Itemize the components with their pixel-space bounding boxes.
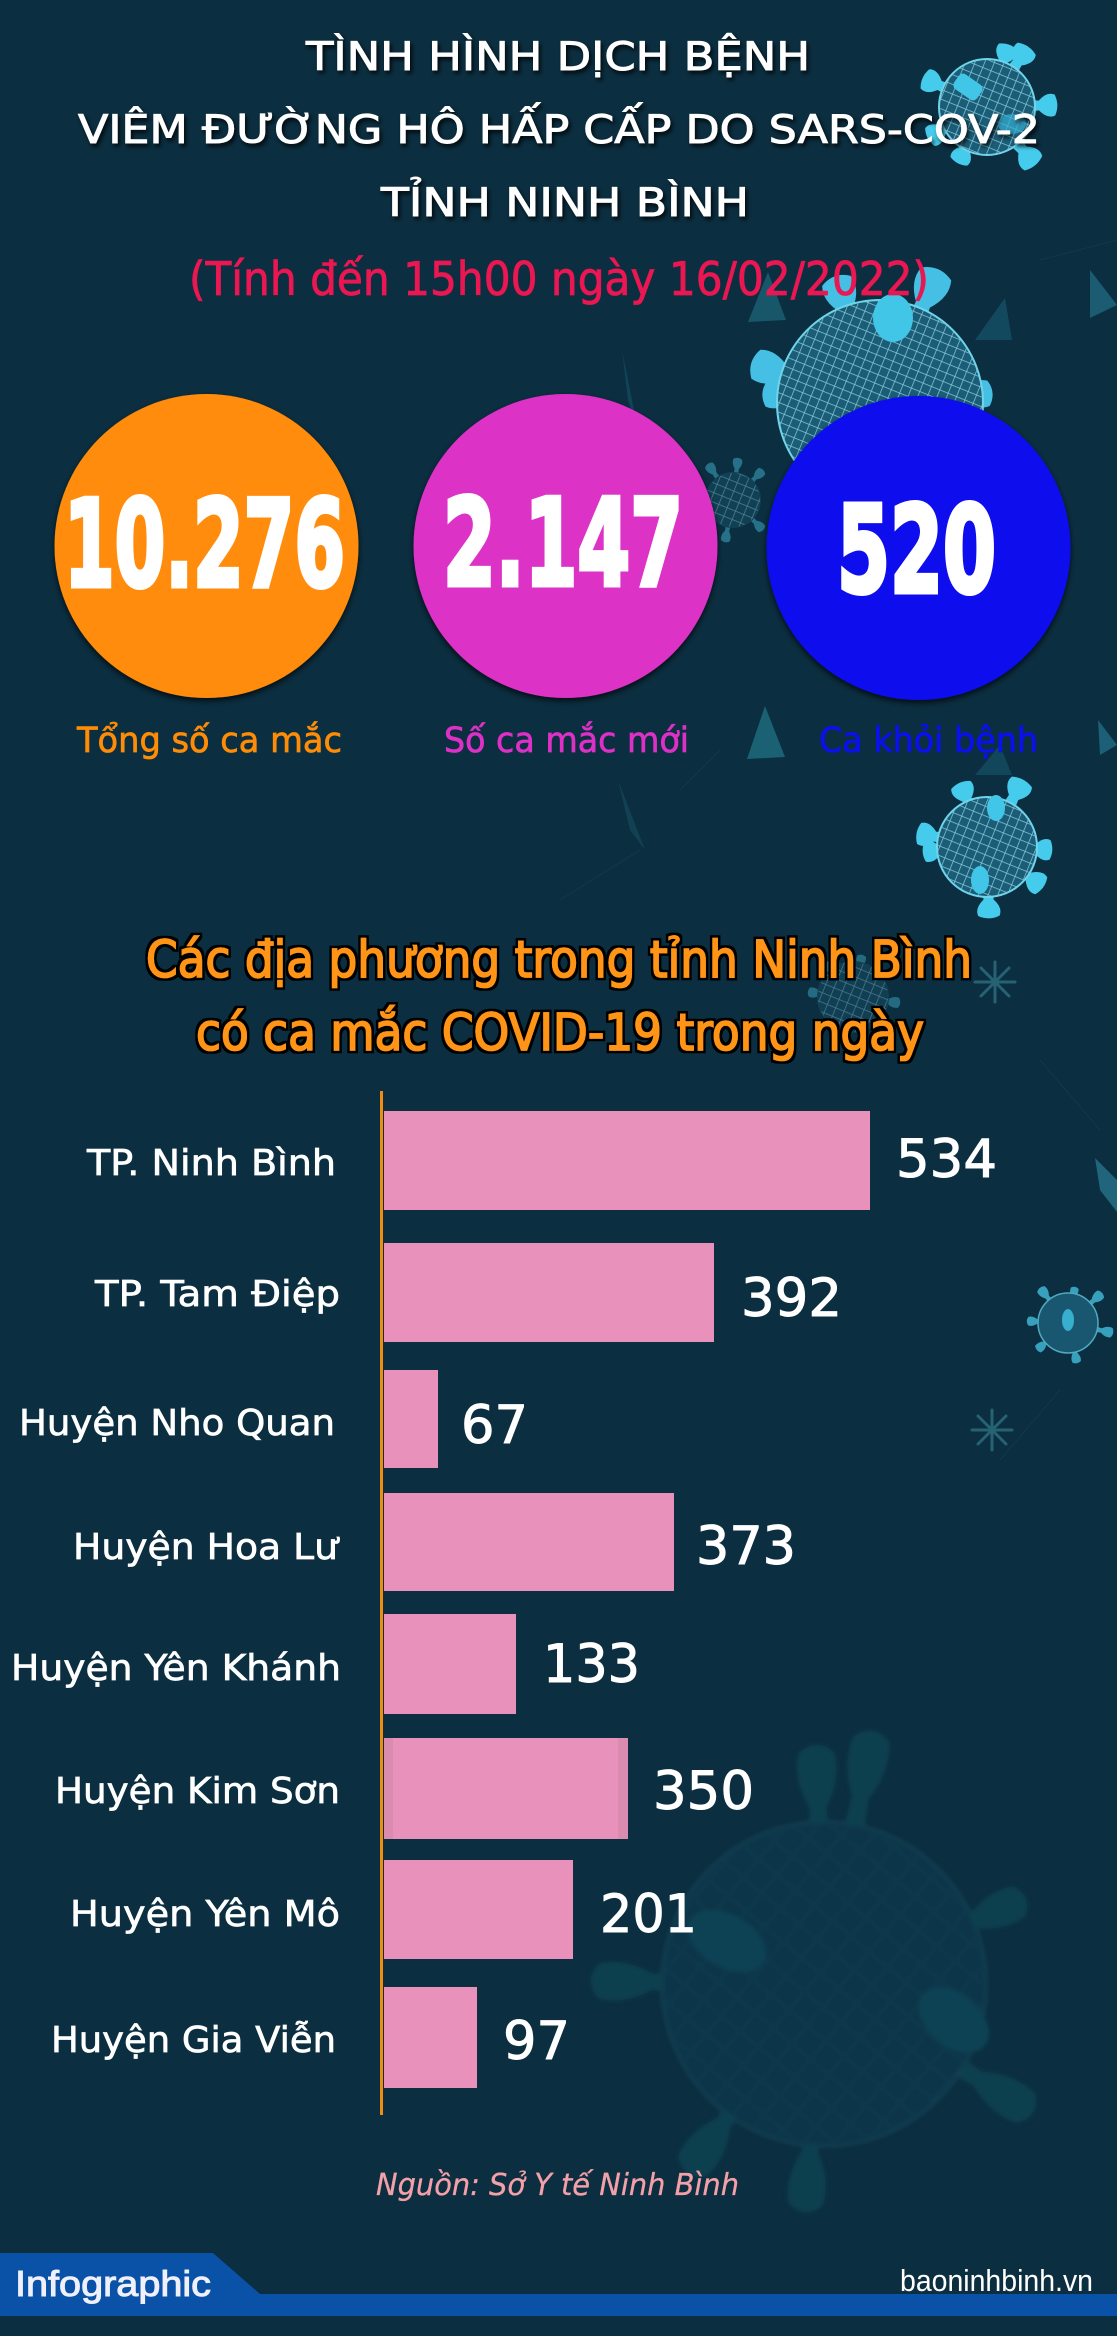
row: Huyện Kim Sơn (55, 1738, 754, 1839)
title: VIÊM ĐƯỜNG HÔ HẤP CẤP DO SARS-COV-2 (78, 102, 1040, 153)
stat: new cases (414, 394, 718, 761)
row: TP. Ninh Bình: 534 (896, 1129, 997, 1190)
stat: total cases (54, 394, 358, 761)
row: Huyện Nho Quan (19, 1370, 528, 1468)
website: baoninhbinh.vn (900, 2263, 1093, 2298)
row: Huyện Hoa Lư: 373 (696, 1516, 796, 1577)
stat: new cases: Số ca mắc mới (444, 720, 689, 761)
stat: recovered: Ca khỏi bệnh (819, 721, 1038, 761)
row: Huyện Nho Quan: Huyện Nho Quan (19, 1403, 335, 1444)
stat: recovered (766, 396, 1070, 761)
title: TÌNH HÌNH DỊCH BỆNH (305, 33, 810, 80)
icon: faded virus behind heading (807, 954, 901, 1033)
row: Huyện Gia Viễn: 97 (503, 2011, 570, 2072)
icon: virus top right (918, 40, 1058, 173)
stat: recovered: 520 (837, 482, 996, 621)
row: TP. Tam Điệp (94, 1243, 842, 1342)
background triangles and network lines (560, 240, 1117, 1460)
row: Huyện Yên Khánh: 133 (543, 1634, 640, 1695)
chart heading: Các địa phương trong tỉnh Ninh Bình (146, 931, 972, 990)
chart heading (146, 931, 972, 1063)
row: Huyện Yên Mô (70, 1860, 697, 1959)
row: Huyện Kim Sơn: 350 (653, 1761, 754, 1822)
date subtitle: (Tính đến 15h00 ngày 16/02/2022) (189, 252, 929, 306)
icon: small particle lower (972, 1410, 1012, 1450)
row: Huyện Gia Viễn: Huyện Gia Viễn (51, 2020, 336, 2061)
row: Huyện Yên Khánh: Huyện Yên Khánh (11, 1648, 341, 1689)
footer band (0, 2253, 1117, 2316)
row: Huyện Gia Viễn (51, 1987, 570, 2088)
chart axis (380, 1091, 383, 2115)
source note: Nguồn: Sở Y tế Ninh Bình (376, 2168, 739, 2203)
icon: virus behind date line (746, 262, 994, 506)
stat: total cases: 10.276 (64, 476, 345, 615)
bar chart (11, 1091, 997, 2115)
icon: small virus right edge (1027, 1285, 1114, 1364)
row: Huyện Hoa Lư: Huyện Hoa Lư (73, 1527, 340, 1568)
icon: small particle upper (975, 962, 1015, 1002)
row: Huyện Hoa Lư (73, 1493, 796, 1591)
row: TP. Tam Điệp: 392 (741, 1268, 842, 1329)
row: TP. Ninh Bình (86, 1111, 997, 1210)
row: Huyện Yên Mô: Huyện Yên Mô (70, 1894, 340, 1935)
footer label: Infographic (15, 2263, 211, 2304)
chart heading: có ca mắc COVID-19 trong ngày (196, 1004, 924, 1063)
row: Huyện Kim Sơn: Huyện Kim Sơn (55, 1771, 340, 1812)
icon: large faded virus (591, 1727, 1043, 2214)
row: TP. Ninh Bình: TP. Ninh Bình (86, 1143, 336, 1184)
title: TỈNH NINH BÌNH (380, 177, 749, 226)
row: TP. Tam Điệp: TP. Tam Điệp (94, 1274, 340, 1315)
row: Huyện Nho Quan: 67 (461, 1395, 528, 1456)
icon: virus below stat labels (914, 774, 1053, 919)
row: Huyện Yên Mô: 201 (600, 1884, 697, 1945)
stat: total cases: Tổng số ca mắc (76, 720, 342, 761)
stat: new cases: 2.147 (443, 475, 683, 614)
icon: small faded virus between circles (704, 457, 767, 543)
row: Huyện Yên Khánh (11, 1614, 640, 1714)
title (78, 33, 1040, 226)
